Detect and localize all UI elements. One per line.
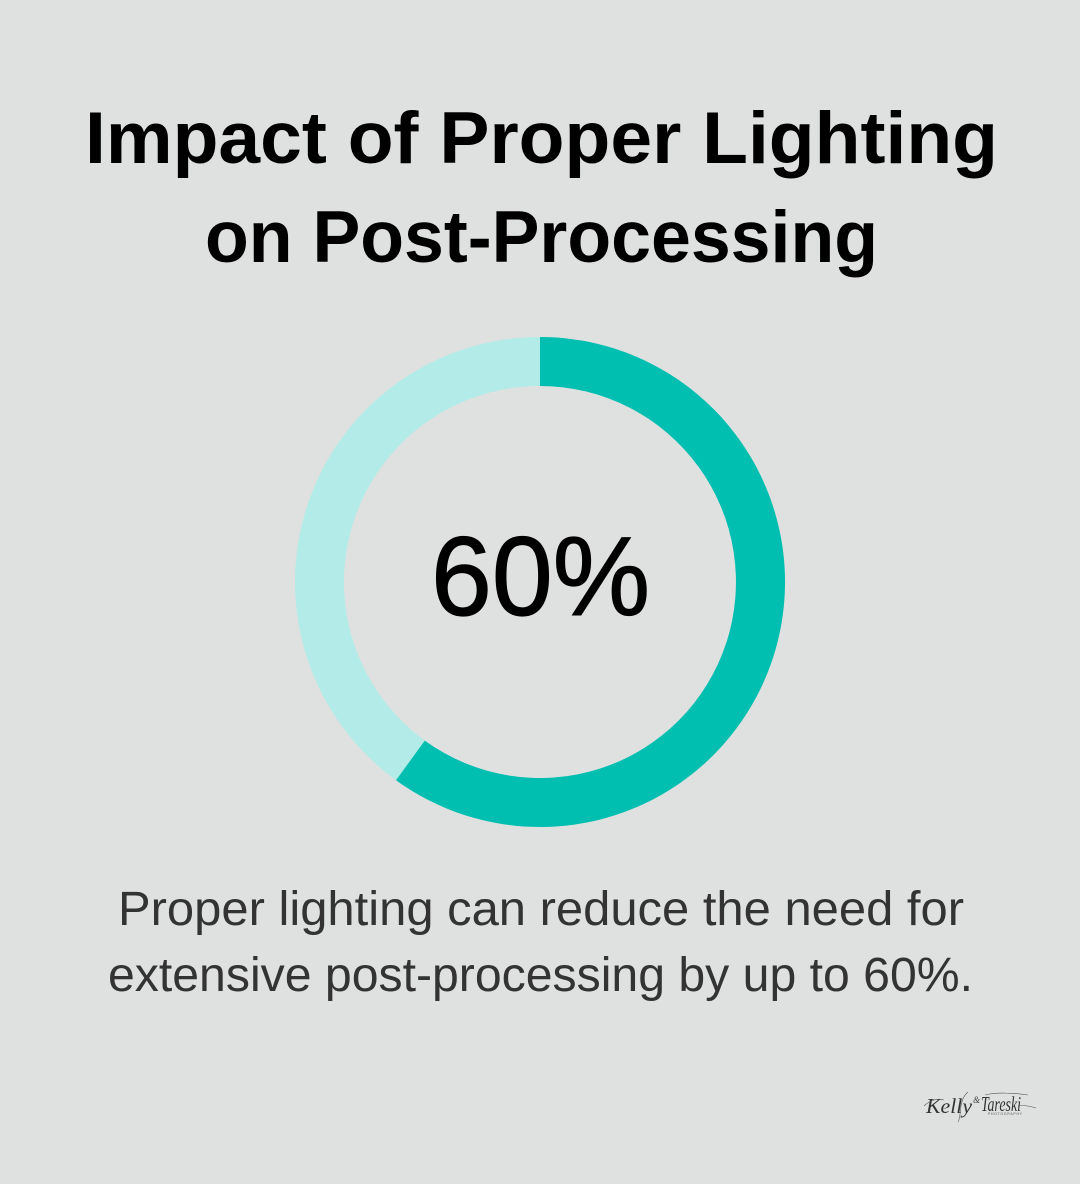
donut chart: 60%: [295, 337, 785, 827]
description text: extensive post-processing by up to 60%.: [108, 949, 973, 1002]
logo: photographer signature: &: [973, 1095, 980, 1105]
logo: photographer signature: PHOTOGRAPHY: [988, 1112, 1023, 1116]
logo: photographer signature: [924, 1092, 1036, 1122]
center value: 60%: [431, 514, 650, 639]
title: Impact of Proper Lighting: [85, 98, 998, 179]
title: on Post-Processing: [205, 197, 878, 278]
ring track: remaining 40%: [295, 337, 540, 780]
ring value: 60%: [396, 337, 785, 827]
description text: Proper lighting can reduce the need for: [118, 883, 964, 936]
logo: photographer signature: Kelly: [925, 1094, 973, 1118]
description text: [108, 883, 973, 1002]
logo: photographer signature: Tareski: [981, 1092, 1021, 1116]
title: [85, 98, 998, 278]
